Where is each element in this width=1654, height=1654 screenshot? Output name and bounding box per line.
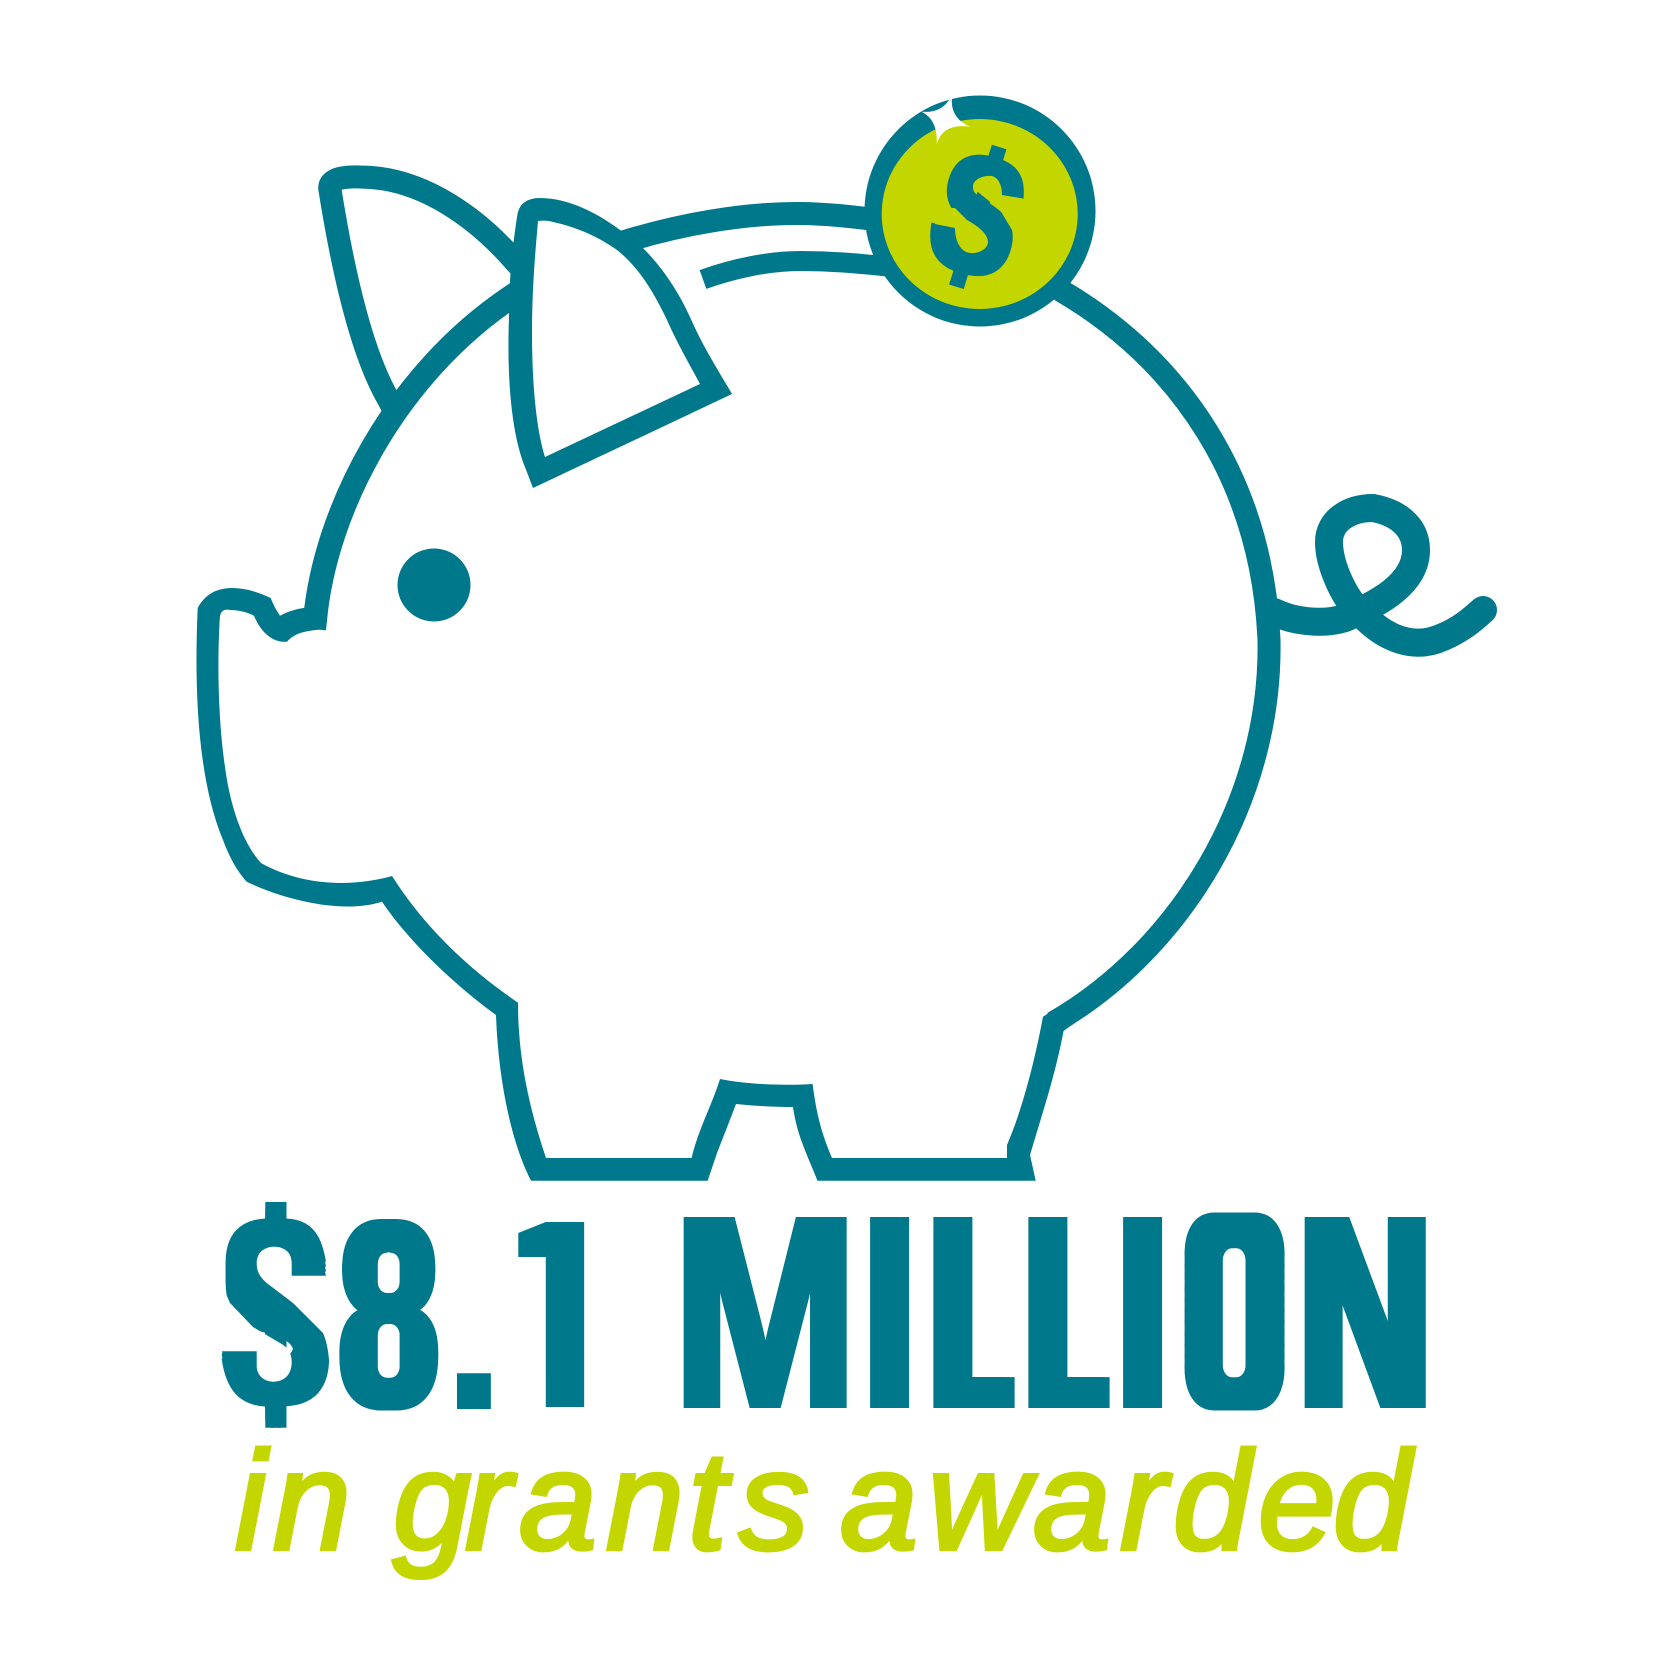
pig: front ear <box>508 198 732 488</box>
headline: $8.1 MILLION: 1 <box>525 1164 598 1465</box>
pig: body top outline <box>620 213 885 243</box>
headline: $8.1 MILLION: 8 <box>341 1168 436 1461</box>
headline: $8.1 MILLION: L <box>1032 1157 1101 1467</box>
subheading: in grants awarded: in grants awarded <box>235 1422 1415 1579</box>
coin: dollar sign: $ <box>912 115 1043 317</box>
headline: $8.1 MILLION: I <box>852 1157 927 1467</box>
headline: $8.1 MILLION: M <box>673 1157 858 1467</box>
headline: $8.1 MILLION: . <box>441 1192 507 1460</box>
pig: body right outline <box>1053 290 1269 1023</box>
coin: lime face <box>882 119 1078 309</box>
headline: $8.1 MILLION: I <box>1105 1157 1180 1467</box>
pig: back highlight line <box>703 261 892 280</box>
pig: body upper left outline <box>314 284 530 629</box>
pig: snout, chin, legs and belly <box>196 588 1080 1181</box>
headline: $8.1 MILLION <box>222 1157 1431 1467</box>
headline: $8.1 MILLION: O <box>1200 1245 1268 1379</box>
coin: white sparkle <box>922 98 970 144</box>
headline: $8.1 MILLION: L <box>937 1157 1007 1467</box>
headline: $8.1 MILLION: $ <box>225 1172 326 1453</box>
headline: $8.1 MILLION: N <box>1300 1157 1431 1467</box>
pig: back ear <box>330 177 530 412</box>
coin <box>864 96 1096 326</box>
pig: eye <box>398 548 470 622</box>
coin: outer ring <box>864 96 1096 326</box>
pig: curly tail <box>1274 508 1483 643</box>
